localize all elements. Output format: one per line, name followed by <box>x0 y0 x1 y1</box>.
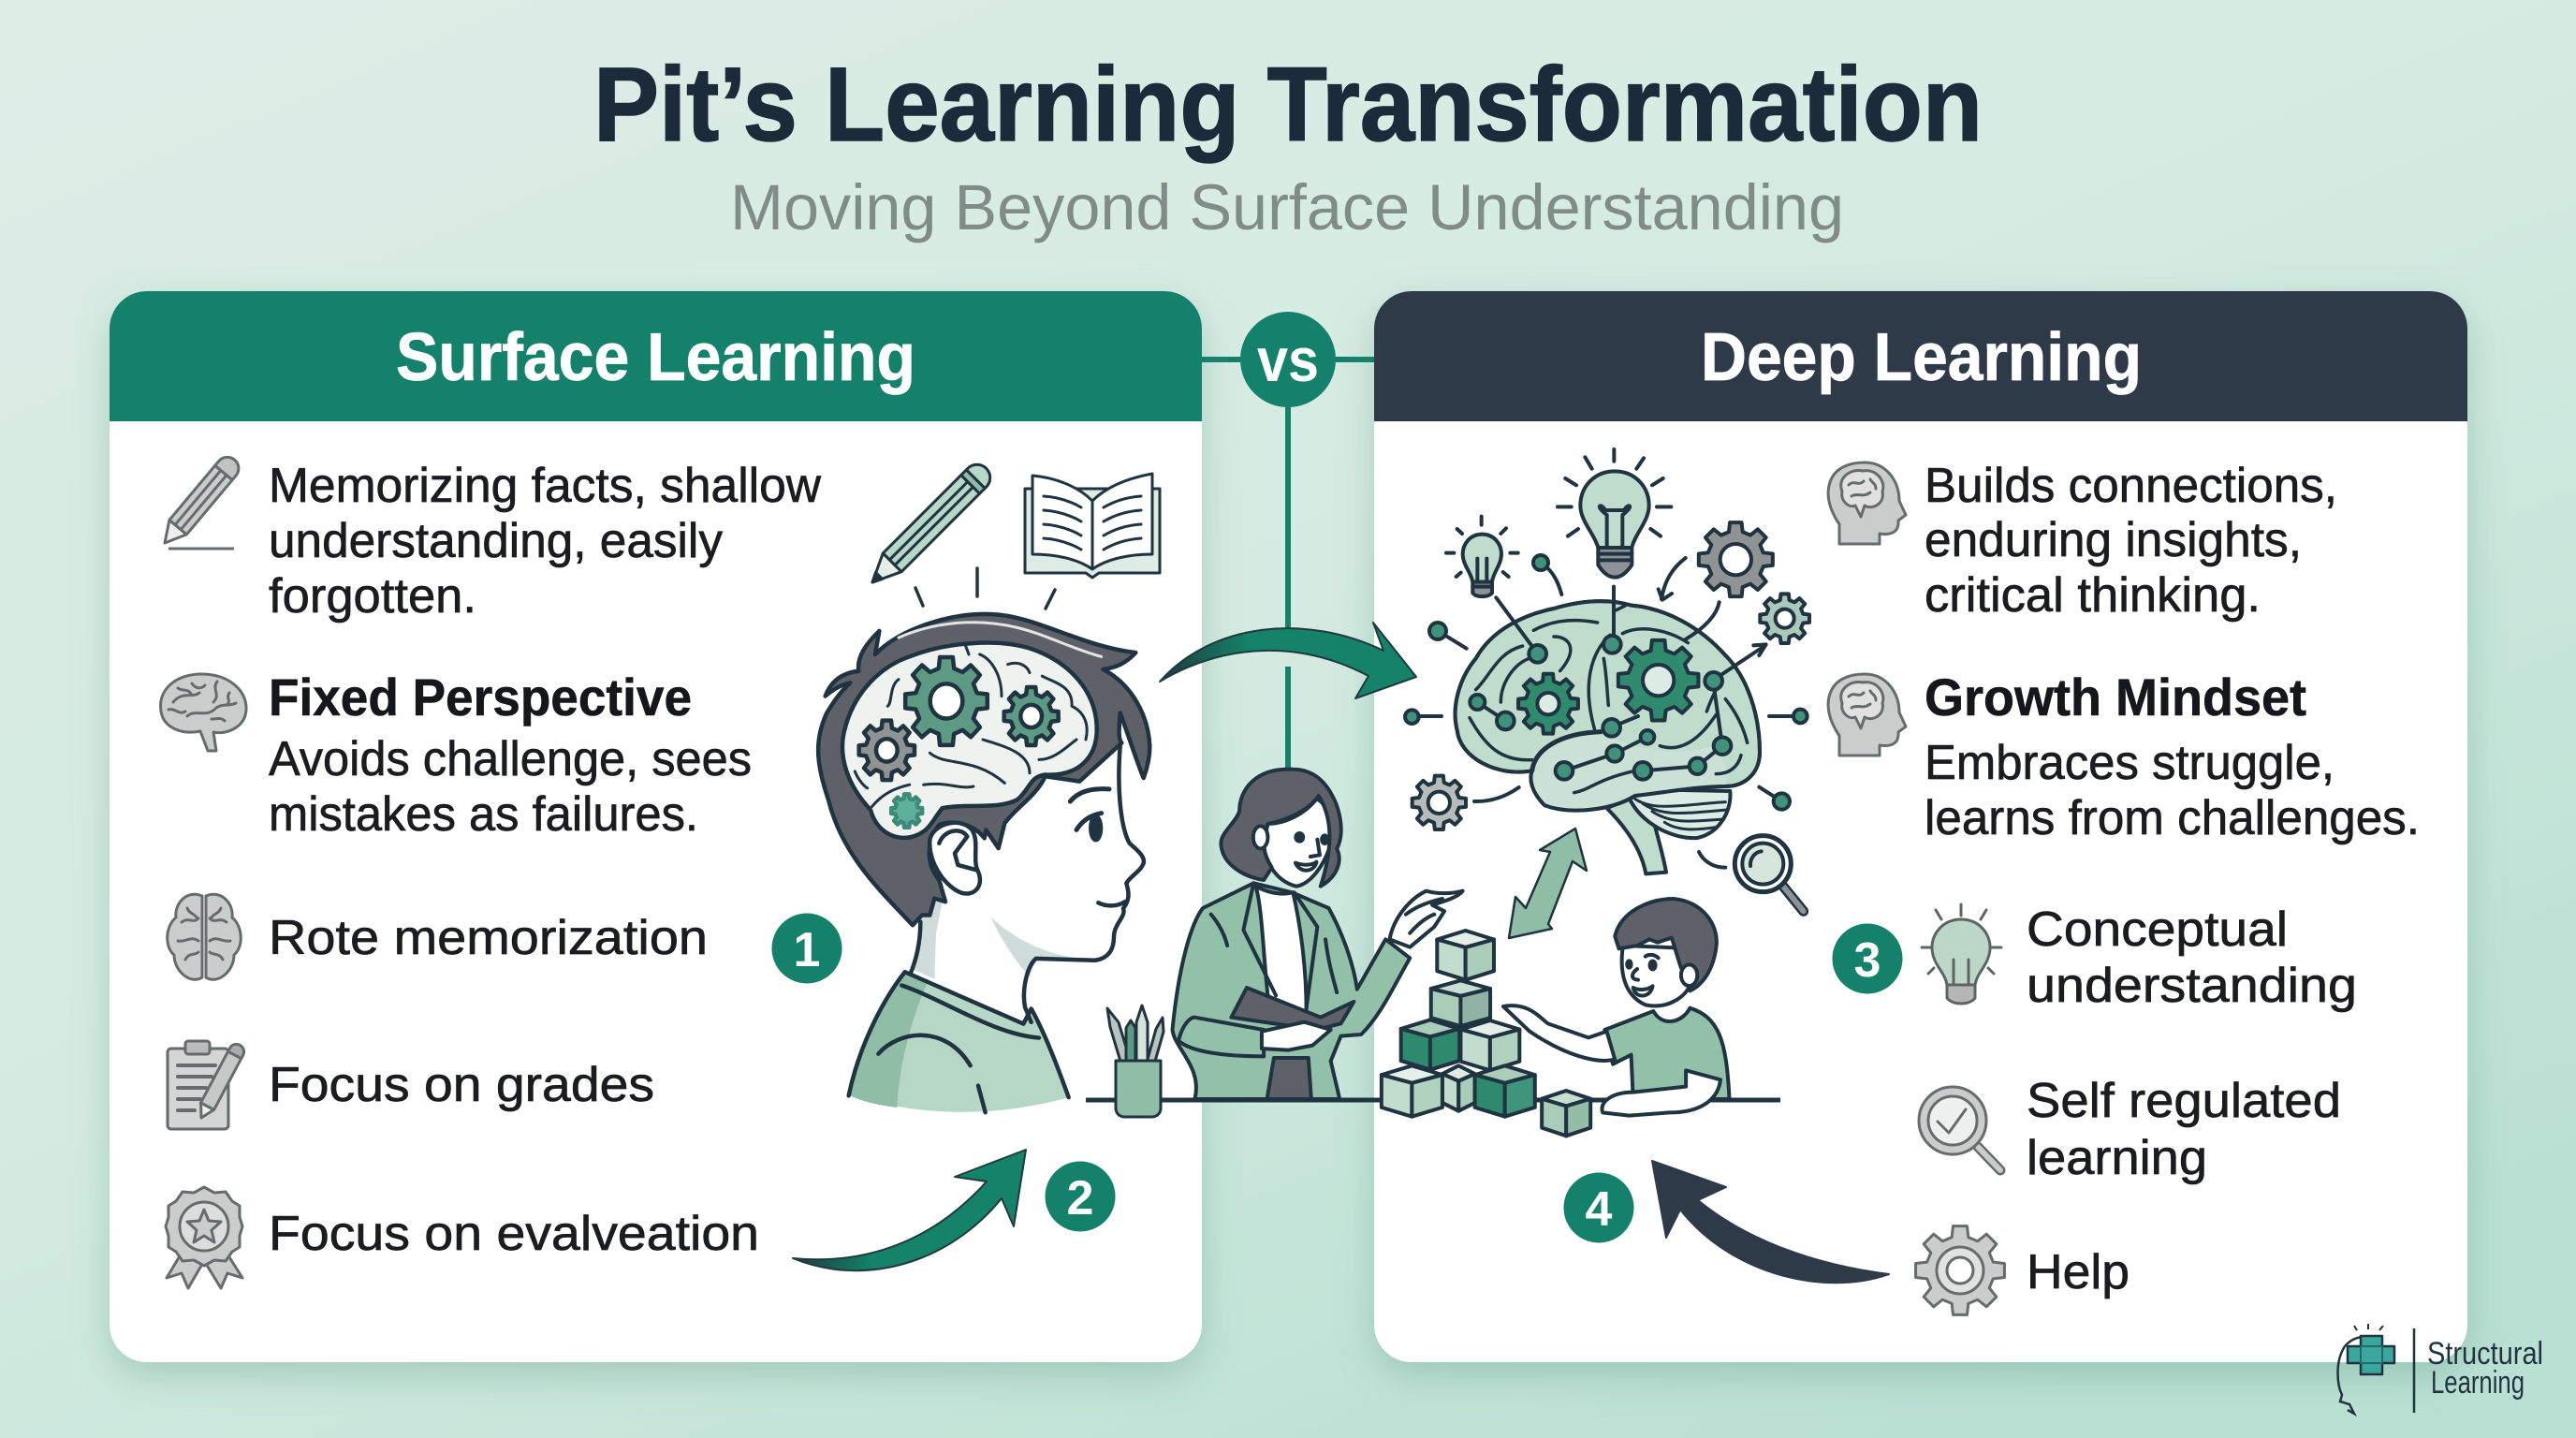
child lower arm <box>1602 1070 1720 1116</box>
heading: growth mindset: Growth Mindset <box>1925 668 2306 726</box>
text: conceptual understanding: understanding <box>2027 959 2357 1013</box>
boy face profile <box>911 746 1144 1022</box>
text: embraces struggle: Embraces struggle, <box>1925 736 2334 790</box>
child hair <box>1615 899 1717 990</box>
logo text <box>2427 1336 2543 1401</box>
brain nodes <box>1405 555 1808 810</box>
illustration: teacher <box>1173 770 1463 1099</box>
text: avoids challenge: mistakes as failures. <box>269 787 698 842</box>
number badge 2: 2 <box>1067 1171 1093 1225</box>
arrow: double arrow <box>1509 829 1587 938</box>
text: embraces struggle <box>1925 736 2420 845</box>
text: self regulated learning <box>2027 1074 2341 1185</box>
panel: surface learning <box>110 291 1202 1362</box>
arrow: help to centre <box>1652 1161 1889 1283</box>
child features <box>1681 964 1697 986</box>
teacher lapels <box>1211 883 1337 1008</box>
illustration: open book <box>1025 474 1160 578</box>
vs badge: vs <box>1257 325 1319 394</box>
rays above head <box>915 568 1055 609</box>
panel: deep learning <box>1374 291 2467 1362</box>
boy eye and brow <box>1070 789 1109 829</box>
brain gears <box>1618 640 1698 720</box>
number badge 4: 4 <box>1586 1182 1613 1237</box>
arrow: surface to deep <box>1160 623 1416 698</box>
brain stem <box>1607 796 1666 873</box>
text: self regulated learning: learning <box>2027 1131 2207 1185</box>
text: self regulated learning: Self regulated <box>2027 1074 2341 1128</box>
teacher hand on book <box>1262 1022 1331 1050</box>
heading: deep learning: Deep Learning <box>1701 320 2142 395</box>
teacher sleeve <box>1178 1018 1264 1056</box>
illustration: building blocks <box>1382 931 1590 1136</box>
child shirt <box>1604 1008 1730 1099</box>
heading: surface learning: Surface Learning <box>396 320 915 395</box>
neck shadow <box>915 893 1079 978</box>
logo text: Learning <box>2431 1365 2525 1401</box>
text: memorizing: understanding, easily <box>269 514 723 568</box>
teacher ear and features <box>1253 826 1267 848</box>
connector: vs lines <box>1202 360 1374 777</box>
icon: award badge <box>166 1187 242 1288</box>
panel header: deep learning <box>1374 291 2467 421</box>
panel header: surface learning <box>110 291 1202 421</box>
icon: head with growth brain <box>1828 674 1906 756</box>
teacher jacket <box>1173 883 1410 1099</box>
boy brain <box>842 643 1097 838</box>
small lightbulb <box>1446 517 1518 596</box>
teacher shirt <box>1255 887 1307 1020</box>
boy mouth <box>1098 902 1125 905</box>
text: builds connections: enduring insights, <box>1925 513 2302 567</box>
logo: structural learning <box>2338 1324 2543 1414</box>
text: memorizing: forgotten. <box>269 569 476 624</box>
text: conceptual understanding <box>2027 902 2357 1013</box>
child raised arm <box>1503 1005 1615 1061</box>
logo divider <box>2413 1328 2415 1413</box>
text: focus on grades: Focus on grades <box>269 1058 654 1112</box>
icon: magnifier with check <box>1919 1087 2000 1170</box>
text: avoids challenge <box>269 732 752 842</box>
boy hair <box>818 614 1149 925</box>
outer gears <box>1412 522 1809 829</box>
number badge 3 <box>1833 923 1902 994</box>
text: builds connections <box>1925 459 2337 623</box>
illustration: connected brain <box>1405 449 1809 911</box>
number badge 3: 3 <box>1854 933 1881 988</box>
illustration: pencil large <box>863 459 996 592</box>
title: Pit’s Learning Transformation <box>593 46 1983 163</box>
icon: pencil small <box>156 452 243 550</box>
logo text: Structural <box>2427 1336 2543 1372</box>
text: help: Help <box>2027 1245 2130 1299</box>
illustration: pencil cup <box>1107 1005 1164 1117</box>
table line <box>1086 1097 1780 1103</box>
text: memorizing <box>269 459 821 624</box>
boy ear <box>929 823 980 894</box>
teacher book <box>1231 988 1354 1030</box>
icon: clipboard <box>168 1041 246 1129</box>
cerebrum <box>1456 601 1760 811</box>
text: avoids challenge: Avoids challenge, sees <box>269 732 752 786</box>
illustration: child <box>1503 899 1730 1116</box>
text: builds connections: critical thinking. <box>1925 568 2261 623</box>
icon: help gear <box>1916 1226 2004 1314</box>
arrow: to centre from surface <box>793 1150 1026 1270</box>
teacher pointing hand <box>1390 891 1463 947</box>
illustration: boy head with brain <box>818 614 1149 1112</box>
big lightbulb <box>1558 449 1671 578</box>
subtitle: Moving Beyond Surface Understanding <box>730 171 1844 243</box>
number badge 4 <box>1563 1172 1634 1243</box>
text: conceptual understanding: Conceptual <box>2027 902 2288 957</box>
logo icon <box>2338 1324 2394 1414</box>
icon: side brain <box>161 674 246 751</box>
child face <box>1622 946 1698 1006</box>
teacher hair <box>1221 770 1341 887</box>
boy shirt <box>849 972 1069 1112</box>
boy brain gears <box>859 657 1059 828</box>
icon: head with brain <box>1828 462 1906 544</box>
icon: top brain <box>168 894 241 979</box>
connection lines <box>1420 558 1800 868</box>
brain folds <box>1470 606 1748 793</box>
number badge 2 <box>1045 1161 1116 1232</box>
text: builds connections: Builds connections, <box>1925 459 2337 513</box>
text: memorizing: Memorizing facts, shallow <box>269 459 821 513</box>
magnifying glass <box>1734 836 1804 911</box>
text: focus on evaluation: Focus on evalveation <box>269 1207 759 1261</box>
heading: fixed perspective: Fixed Perspective <box>269 668 692 726</box>
teacher skirt <box>1267 1058 1311 1099</box>
text: embraces struggle: learns from challenges. <box>1925 791 2420 845</box>
icon: lightbulb <box>1922 904 2001 1004</box>
vs badge <box>1240 312 1336 407</box>
cerebellum <box>1629 789 1730 838</box>
text: rote memorization: Rote memorization <box>269 911 708 965</box>
teacher face <box>1264 799 1333 887</box>
number badge 1 <box>771 914 842 983</box>
temporal lobe <box>1530 732 1726 811</box>
number badge 1: 1 <box>794 923 820 977</box>
